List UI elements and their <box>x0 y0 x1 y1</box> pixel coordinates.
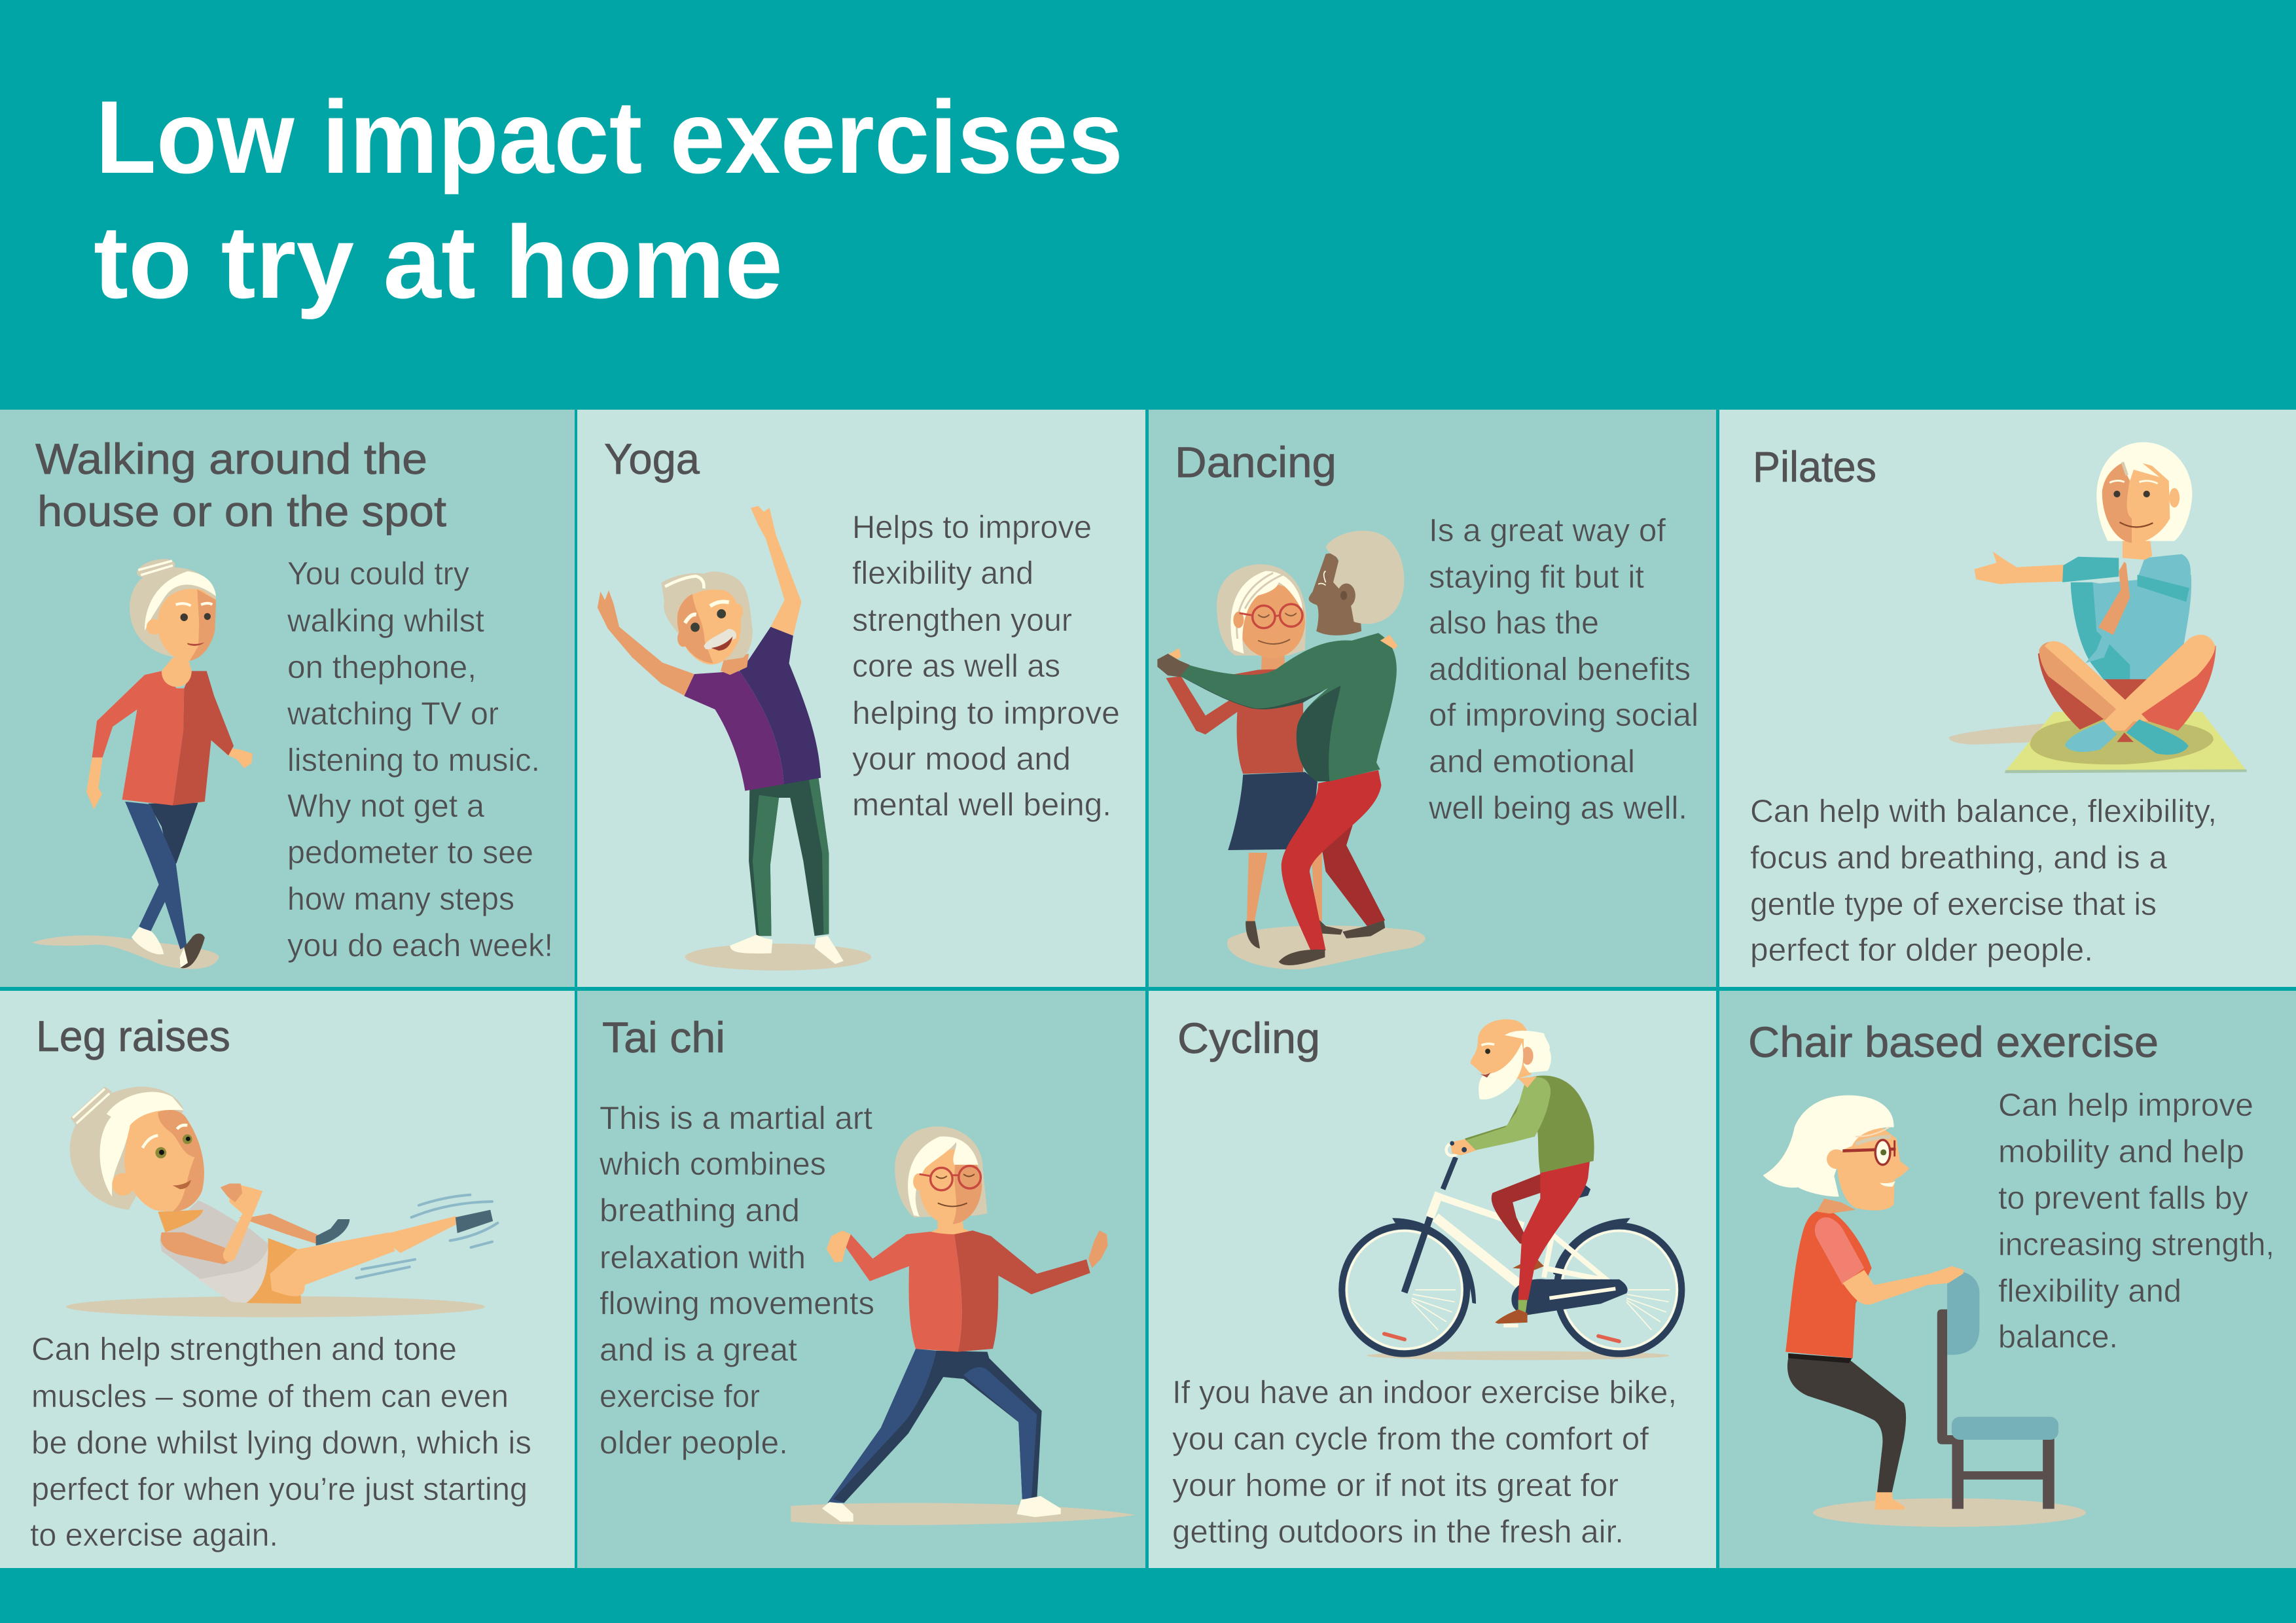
heading: cycling: Cycling <box>1177 1014 1320 1062</box>
heading: dancing: Dancing <box>1175 438 1336 486</box>
panel: pilates <box>1719 410 2296 987</box>
heading: yoga: Yoga <box>604 435 700 483</box>
text: walking <box>287 556 553 963</box>
text: chair based exercise: balance. <box>1998 1319 2118 1355</box>
text: yoga: core as well as <box>852 649 1060 684</box>
illustration: woman with chair <box>1763 1096 2086 1527</box>
text: dancing: well being as well. <box>1428 791 1687 826</box>
text: tai chi: breathing and <box>600 1193 800 1228</box>
text: leg raises: muscles – some of them can even <box>31 1379 509 1414</box>
text: walking: on thephone, <box>287 650 476 685</box>
text: leg raises <box>30 1332 531 1553</box>
text: leg raises: perfect for when you’re just starting <box>31 1472 528 1507</box>
text: dancing <box>1428 513 1698 826</box>
text: chair based exercise: to prevent falls by <box>1998 1181 2248 1216</box>
heading: leg raises: Leg raises <box>36 1012 230 1060</box>
text: yoga: strengthen your <box>852 603 1072 638</box>
text: chair based exercise: increasing strength, <box>1998 1227 2274 1262</box>
illustration: yoga man <box>598 506 871 971</box>
text: yoga: your mood and <box>852 741 1071 777</box>
text: pilates: Can help with balance, flexibility, <box>1750 794 2217 829</box>
illustration: walking woman <box>32 556 253 969</box>
text: dancing: and emotional <box>1429 744 1635 779</box>
panel: leg raises <box>0 991 575 1568</box>
text: dancing: of improving social <box>1429 698 1698 733</box>
title: to try at home <box>94 205 783 320</box>
illustration: man cycling <box>1342 1019 1681 1360</box>
heading: chair based exercise: Chair based exercise <box>1748 1018 2159 1066</box>
text: cycling: your home or if not its great for <box>1172 1468 1619 1503</box>
panel: walking <box>0 410 575 987</box>
text: walking: walking whilst <box>287 603 484 639</box>
heading: walking <box>35 435 446 535</box>
text: tai chi: and is a great <box>600 1332 797 1368</box>
text: dancing: additional benefits <box>1429 652 1691 687</box>
text: walking: pedometer to see <box>287 835 533 870</box>
panel: dancing <box>1149 410 1716 987</box>
text: yoga: Helps to improve <box>852 510 1092 545</box>
text: yoga: mental well being. <box>852 787 1111 823</box>
text: leg raises: be done whilst lying down, which is <box>31 1425 531 1461</box>
heading: tai chi: Tai chi <box>602 1013 725 1061</box>
heading: pilates: Pilates <box>1753 442 1876 491</box>
text: leg raises: Can help strengthen and tone <box>31 1332 457 1367</box>
text: cycling <box>1172 1375 1677 1550</box>
text: walking: how many steps <box>287 882 514 917</box>
text: tai chi <box>599 1101 874 1461</box>
text: pilates: perfect for older people. <box>1750 933 2093 968</box>
illustration: tai chi woman <box>791 1126 1135 1525</box>
text: yoga: flexibility and <box>852 556 1033 591</box>
panel: tai chi <box>577 991 1145 1568</box>
text: pilates: focus and breathing, and is a <box>1750 840 2168 876</box>
text: walking: watching TV or <box>287 696 499 732</box>
panel: yoga <box>577 410 1145 987</box>
text: walking: listening to music. <box>287 743 540 778</box>
text: tai chi: flowing movements <box>600 1286 874 1321</box>
text: dancing: Is a great way of <box>1429 513 1666 548</box>
text: yoga <box>852 510 1120 823</box>
text: chair based exercise <box>1998 1088 2274 1355</box>
text: leg raises: to exercise again. <box>30 1518 278 1553</box>
text: walking: Why not get a <box>287 789 485 824</box>
text: walking: You could try <box>287 556 469 592</box>
panel: chair based exercise <box>1719 991 2296 1568</box>
text: chair based exercise: flexibility and <box>1998 1274 2181 1309</box>
text: yoga: helping to improve <box>852 696 1120 731</box>
text: cycling: If you have an indoor exercise bike, <box>1172 1375 1677 1410</box>
illustration: woman doing leg raise <box>66 1086 497 1317</box>
text: dancing: staying fit but it <box>1429 560 1644 595</box>
title: Low impact exercises <box>96 80 1123 195</box>
heading: walking: Walking around the <box>35 435 427 483</box>
illustration: dancing couple <box>1157 531 1426 969</box>
text: chair based exercise: mobility and help <box>1998 1134 2244 1169</box>
text: pilates <box>1750 794 2217 968</box>
text: chair based exercise: Can help improve <box>1998 1088 2253 1123</box>
text: pilates: gentle type of exercise that is <box>1750 887 2157 922</box>
text: dancing: also has the <box>1429 605 1599 641</box>
text: tai chi: older people. <box>600 1425 788 1461</box>
text: cycling: you can cycle from the comfort of <box>1172 1421 1649 1457</box>
heading: walking: house or on the spot <box>37 487 446 535</box>
panel: cycling <box>1149 991 1716 1568</box>
text: tai chi: exercise for <box>600 1379 760 1414</box>
text: tai chi: This is a martial art <box>600 1101 872 1136</box>
illustration: pilates woman on mat <box>1949 442 2247 773</box>
title <box>94 80 1123 320</box>
text: walking: you do each week! <box>287 928 553 963</box>
text: cycling: getting outdoors in the fresh air. <box>1172 1514 1624 1550</box>
text: tai chi: relaxation with <box>600 1240 806 1275</box>
text: tai chi: which combines <box>599 1147 826 1182</box>
